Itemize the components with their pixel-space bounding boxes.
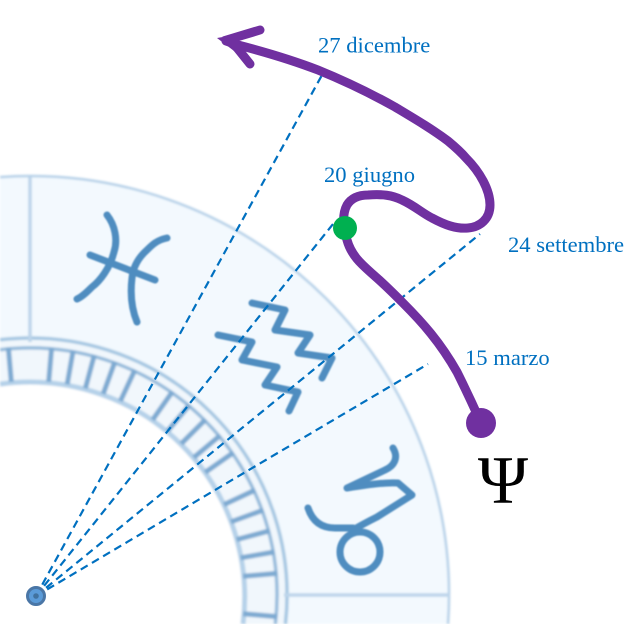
label: 24 settembre: 24 settembre [508, 232, 624, 257]
Neptune symbol: Ψ [478, 442, 528, 518]
sight lines from Earth [36, 75, 480, 596]
label: 27 dicembre: 27 dicembre [318, 32, 430, 58]
label: 15 marzo: 15 marzo [465, 345, 550, 370]
Earth marker [28, 588, 44, 604]
Neptune start point [466, 408, 496, 438]
zodiac wheel [0, 176, 450, 624]
sign: Pisces [77, 215, 167, 322]
sign: Aquarius [218, 303, 332, 411]
20 June point [333, 216, 357, 240]
label: 20 giugno: 20 giugno [324, 162, 415, 187]
sign: Capricorn [308, 448, 412, 572]
Neptune path with arrow [217, 30, 490, 423]
